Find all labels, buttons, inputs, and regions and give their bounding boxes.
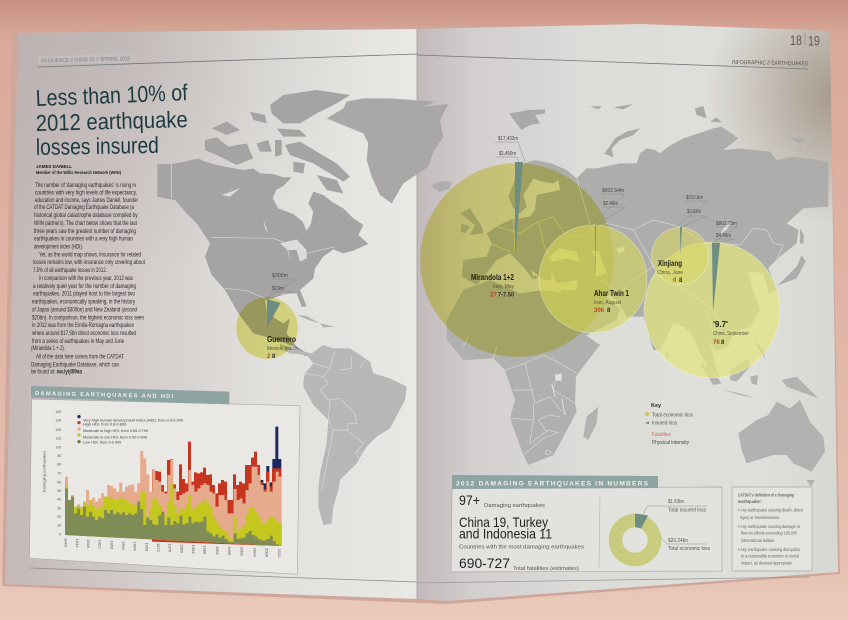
label: Xinjiang: 0 <box>673 278 677 284</box>
callout labels: loss values: $2.46m <box>603 201 618 207</box>
panel heading bar <box>452 475 658 489</box>
chart y axis: 70 <box>57 472 61 476</box>
stat: countries: China 19, Turkey <box>459 514 548 530</box>
chart heading bar: DAMAGING EARTHQUAKES AND HDI <box>35 391 174 400</box>
callout labels: loss values: $4.45m <box>716 233 731 239</box>
donut chart: insured vs economic loss <box>616 499 710 560</box>
map: Australia, Indonesia and Madagascar <box>583 340 825 487</box>
byline: Member of the Willis Research Network (WRN) <box>36 170 122 175</box>
circle: Mirandola total economic loss <box>420 163 614 357</box>
circle: Ahar Twin total economic loss <box>539 225 647 333</box>
chart x axis years: 2004 <box>253 548 258 557</box>
footer rule right <box>417 577 810 583</box>
map: Africa and Madagascar <box>447 280 600 465</box>
earthquake circles <box>236 163 780 378</box>
chart x axis years: 1996 <box>227 546 232 556</box>
stat: countries: Countries with the most damaging earthquakes <box>459 544 584 550</box>
label: 9.7 <box>713 320 749 346</box>
map: Svalbard, Novaya Zemlya and Arctic islands <box>509 104 722 157</box>
panel: definition of damaging earthquake: CATDAT's definition of a 'damaging <box>738 492 794 498</box>
running head right <box>417 55 808 69</box>
chart y axis: 90 <box>57 454 61 458</box>
page shading: top left corner <box>12 29 417 300</box>
panel: definition of damaging earthquake: flow-on effects exceeding 105,000 <box>741 530 797 536</box>
chart x axis years: 1992 <box>215 546 220 556</box>
chart x axis years: 1968 <box>144 542 149 552</box>
callout labels: loss values: $312.6m <box>686 195 703 201</box>
label: Mirandola 1+2: Mirandola 1+2 <box>471 273 514 282</box>
label: Xinjiang: Xinjiang <box>658 259 682 268</box>
label: Mirandola 1+2: 7-7.50 <box>498 292 515 298</box>
title: 2012 earthquake <box>35 106 188 136</box>
wedge: Ahar Twin <box>595 226 596 279</box>
chart x axis years: 1960 <box>121 541 126 551</box>
panel: definition of damaging earthquake: international dollars. <box>741 538 775 543</box>
legend: key: Key <box>651 403 662 409</box>
panel heading bar: 2012 DAMAGING EARTHQUAKES IN NUMBERS <box>456 480 649 488</box>
series: moderate to low HDI <box>65 483 282 546</box>
donut chart: insured vs economic loss: Total economic loss <box>668 546 710 552</box>
article body text: be found at: ow.ly/jl09ea <box>31 368 82 376</box>
chart heading bar <box>31 386 229 404</box>
article body text: historical global catastrophe database compiled by <box>34 212 138 219</box>
article body text: In comparison with the previous year, 2012 was <box>39 275 133 282</box>
running head left: RESILIENCE // ISSUE 02 // SPRING 2013 <box>41 56 130 64</box>
article body text: of the CATDAT Damaging Earthquake Database (a <box>34 204 134 211</box>
label: Guerrero: 2 <box>267 354 271 360</box>
chart legend: High HDI, from 0.8-0.899 <box>83 423 126 427</box>
label: Guerrero: Mexico, March <box>267 346 298 352</box>
panel: 2012 damaging earthquakes in numbers <box>451 475 722 572</box>
label: Guerrero: 8 <box>272 354 276 360</box>
label: Mirandola 1+2 <box>471 273 515 298</box>
article body text: countries with very high levels of life expectancy, <box>35 190 137 196</box>
chart x axis years: 1988 <box>203 545 208 555</box>
insured loss wedges <box>267 162 720 328</box>
byline: JAMES DANIELL <box>36 164 72 169</box>
title: Less than 10% of <box>35 79 189 111</box>
donut chart: insured vs economic loss: $20.24bn <box>668 538 688 544</box>
chart y axis: 0 <box>59 532 61 536</box>
callout labels: loss values: $3.03m <box>687 209 701 215</box>
wedge: 9.7 <box>712 243 720 312</box>
stacked area chart <box>65 427 282 546</box>
legend: key: Physical intensity <box>652 440 689 446</box>
article body text: development index (HDI). <box>34 244 83 250</box>
article body text: a relatively quiet year for the number of damaging <box>33 283 136 290</box>
chart x axis years: 1964 <box>133 542 138 551</box>
chart y axis: 60 <box>57 480 61 484</box>
panel: definition of damaging earthquake <box>732 487 812 571</box>
article body text: earthquakes, economically speaking, in the history <box>32 298 135 306</box>
label: Ahar Twin 1: Iran, August <box>594 300 621 306</box>
spine shadow line <box>416 29 418 599</box>
callout labels: loss values: $1,450m <box>499 151 516 157</box>
callout labels: loss values: $19m <box>272 286 284 292</box>
panel: definition of damaging earthquake: • Any earthquake causing disruption <box>738 547 800 552</box>
legend: key <box>645 403 693 446</box>
wedge: Mirandola <box>515 162 523 257</box>
callout labels: loss values: $17,432m <box>498 136 518 142</box>
stat: 97+ <box>459 492 545 509</box>
label: Xinjiang: China, June <box>657 270 683 276</box>
chart legend: Moderate to low HDI, from 0.50-0.649 <box>83 435 147 439</box>
chart legend: Very high human development index (HDI), from 0.9-0.999 <box>83 418 183 422</box>
article body text <box>31 182 145 376</box>
stat: 97+: Damaging earthquakes <box>484 503 545 509</box>
running head left <box>38 53 417 67</box>
label: 9.7: '9.7' <box>713 320 728 329</box>
article body text: The number of 'damaging earthquakes' is rising in <box>35 182 136 189</box>
chart y axis: 30 <box>57 506 61 510</box>
label: Ahar Twin 1: 8 <box>607 308 611 314</box>
panel: definition of damaging earthquake: • Any earthquake causing death, direct <box>738 508 804 512</box>
label: 9.7: 8 <box>721 340 725 346</box>
chart y axis: 130 <box>55 419 61 423</box>
chart legend <box>77 415 183 445</box>
callout labels: loss values: $300m <box>272 273 288 279</box>
label: 9.7: China, September <box>713 331 749 337</box>
label: Xinjiang <box>657 259 683 284</box>
chart y axis: 10 <box>57 524 61 528</box>
panel: right page <box>417 24 838 601</box>
panel frame <box>451 487 722 572</box>
donut chart: insured vs economic loss: Total insured loss <box>668 508 706 514</box>
panel: definition of damaging earthquake: earthquake': <box>738 499 762 504</box>
series: low HDI <box>65 488 282 546</box>
circle: Xinjiang total economic loss <box>652 228 708 284</box>
panel: left page <box>5 29 417 599</box>
chart y axis: 100 <box>55 445 61 449</box>
map: Eurasia <box>432 127 828 378</box>
circle: Guerrero total economic loss <box>236 297 298 359</box>
chart x axis years: 1972 <box>156 543 161 553</box>
byline <box>36 164 122 175</box>
article body text: from a series of earthquakes in May and June <box>32 338 124 345</box>
chart x axis years: 1980 <box>179 544 184 554</box>
page numbers <box>790 32 820 48</box>
circle: 9.7 total economic loss <box>644 242 780 378</box>
article body text: three years saw the greatest number of damaging <box>34 228 136 235</box>
chart y axis: 20 <box>57 515 61 519</box>
chart x axis years <box>64 538 282 558</box>
chart x axis years: 1952 <box>98 540 103 549</box>
world map <box>157 90 828 525</box>
wedge: Guerrero <box>267 299 280 328</box>
title: losses insured <box>36 132 159 160</box>
article body text: in 2012 was from the Emilia-Romagna earthquakes <box>32 322 134 329</box>
label: Mirandola 1+2: Italy, May <box>493 284 514 290</box>
panel: definition of damaging earthquake: impact, as deemed appropriate. <box>741 560 793 566</box>
chart x axis years: 2000 <box>239 547 244 557</box>
legend: key: Insured loss <box>652 420 677 426</box>
title <box>35 79 189 160</box>
stat: countries: and Indonesia 11 <box>459 526 552 542</box>
chart y axis <box>42 410 61 536</box>
chart x axis years: 1948 <box>86 539 91 549</box>
map: North America and Greenland <box>157 90 448 356</box>
chart y axis: 140 <box>55 410 61 414</box>
article body text: $20bn). In comparison, the highest economic loss seen <box>32 314 144 322</box>
label: Guerrero: Guerrero <box>267 335 296 344</box>
label: Xinjiang: 8 <box>679 278 683 284</box>
stat: fatalities: 690-727 <box>459 555 510 571</box>
chart x axis years: 1984 <box>191 545 196 554</box>
article body text: earthquakes in countries with a very high human <box>34 236 133 242</box>
label: Ahar Twin 1: 306 <box>594 308 605 314</box>
legend: key: Fatalities <box>652 432 671 438</box>
donut chart: insured vs economic loss: $1.53bn <box>668 499 684 505</box>
chart y axis: Damaging earthquakes <box>42 450 46 492</box>
chart y axis: 120 <box>55 428 61 432</box>
legend: key: Total economic loss <box>652 412 693 418</box>
label: Mirandola 1+2: 27 <box>490 292 497 298</box>
chart y axis: 80 <box>57 463 61 467</box>
article body text: Damaging Earthquake Database, which can <box>31 362 119 368</box>
chart x axis years: 2012 <box>277 549 282 558</box>
article body text: education and income, says James Daniell, founder <box>35 197 139 204</box>
chart x axis years: 1940 <box>64 538 69 548</box>
callout labels: loss values <box>272 136 737 292</box>
chart x axis years: 1976 <box>168 543 173 553</box>
article body text: of Japan (around $300bn) and New Zealand (around <box>32 306 137 314</box>
article body text: where around $17.5bn direct economic loss resulted <box>31 330 136 337</box>
callout labels: loss values: $802.73m <box>716 221 737 227</box>
chart legend: Moderate to high HDI, from 0.65-0.799 <box>83 429 148 433</box>
map: South America <box>280 343 407 525</box>
chart y axis: 110 <box>55 437 61 441</box>
article body text: (Mirandola 1 + 2). <box>31 345 65 352</box>
page numbers: 19 <box>808 32 820 48</box>
page shading: top right corner <box>600 24 834 300</box>
panel: damaging earthquakes and HDI chart <box>29 386 300 574</box>
page numbers: 18 <box>790 32 802 48</box>
article body text: All of the data here comes from the CATDAT <box>36 354 124 360</box>
label: Guerrero <box>267 335 298 360</box>
callout labels: loss values: $602.54m <box>602 188 624 194</box>
stat: fatalities <box>459 555 579 572</box>
chart x axis years: 2008 <box>264 548 269 558</box>
article body text: earthquakes. 2011 played host to the largest two <box>33 290 135 298</box>
footer rule left <box>30 568 417 582</box>
label: 9.7: 76 <box>713 340 720 346</box>
panel: definition of damaging earthquake: injury or homelessness. <box>740 515 780 520</box>
article body text: losses remains low, with insurance only covering about <box>33 259 145 266</box>
chart frame <box>29 399 300 574</box>
leader lines <box>265 142 737 299</box>
running head right: INFOGRAPHIC // EARTHQUAKES <box>732 60 808 67</box>
stat: fatalities: Total fatalities (estimates) <box>513 566 579 572</box>
label: Ahar Twin 1: Ahar Twin 1 <box>594 289 629 298</box>
stat: countries <box>459 514 584 550</box>
label: Ahar Twin 1 <box>594 289 629 314</box>
series: moderate to high HDI <box>65 451 282 546</box>
wedge: Xinjiang <box>680 227 682 255</box>
series: very high HDI <box>260 427 281 546</box>
panel: definition of damaging earthquake: to a reasonable economic or social <box>741 554 799 558</box>
article body text: 7.5% of all earthquake losses in 2012. <box>33 267 107 274</box>
chart y axis: 40 <box>57 498 61 502</box>
article body text: Yet, as the world map shows, insurance for related <box>39 252 141 258</box>
chart y axis: 50 <box>57 489 61 493</box>
series: high HDI <box>152 442 281 546</box>
article body text: WIIN partners). The chart below shows that the last <box>34 220 137 227</box>
panel: definition of damaging earthquake: • Any earthquake causing damage or <box>738 524 800 529</box>
chart legend: Low HDI, from 0-0.499 <box>83 441 121 445</box>
stat: 97+: 97+ <box>459 492 480 508</box>
chart x axis years: 1956 <box>109 540 114 550</box>
chart x axis years: 1944 <box>75 539 80 548</box>
